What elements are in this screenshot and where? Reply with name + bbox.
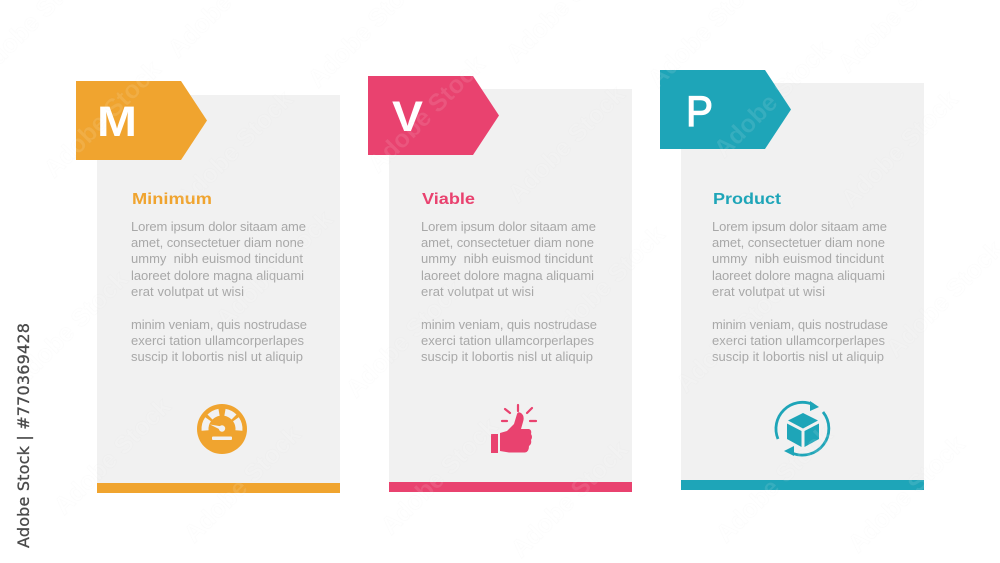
watermark pattern: Adobe Stock (48, 392, 176, 520)
watermark pattern: Adobe Stock (842, 430, 970, 558)
text block: minimum: amet, consectetuer diam none (131, 235, 304, 250)
panel: viable (368, 76, 632, 492)
stock id label: Adobe Stock | #770369428 (14, 323, 33, 548)
heading: Product: Product (713, 191, 782, 208)
panel: product (660, 70, 924, 490)
text block: viable: exerci tation ullamcorperlapes (421, 333, 594, 348)
watermark pattern: Adobe Stock (38, 55, 166, 183)
text block: minimum (131, 219, 307, 364)
text block: viable (421, 219, 597, 364)
text block: product: suscip it lobortis nisl ut aliquip (712, 349, 884, 364)
watermark pattern: Adobe Stock (542, 220, 670, 348)
card background: viable (389, 89, 632, 492)
watermark pattern: Adobe Stock (5, 265, 133, 393)
text block: product: ummy nibh euismod tincidunt (712, 251, 884, 266)
bottom bar: product (681, 480, 924, 490)
watermark pattern: Adobe Stock (835, 85, 963, 213)
icon: box with cycle arrows (776, 401, 829, 456)
watermark pattern: Adobe Stock (170, 85, 298, 213)
watermark pattern: Adobe Stock (710, 420, 838, 548)
watermark pattern: Adobe Stock (340, 275, 468, 403)
watermark pattern: Adobe Stock (210, 205, 338, 333)
watermark pattern: Adobe Stock (502, 80, 630, 208)
icon: thumbs up with rays (491, 405, 536, 453)
watermark pattern: Adobe Stock (375, 412, 503, 540)
text block: minimum: ummy nibh euismod tincidunt (131, 251, 303, 266)
bottom bar: viable (389, 482, 632, 492)
card background: product (681, 83, 924, 490)
text block: product: Lorem ipsum dolor sitaam ame (712, 219, 887, 234)
arrow tag: M: M (97, 98, 137, 146)
panel: minimum (76, 81, 340, 493)
text block: product: erat volutpat ut wisi (712, 284, 825, 299)
text block: minimum: minim veniam, quis nostrudase (131, 317, 307, 332)
text block: viable: Lorem ipsum dolor sitaam ame (421, 219, 596, 234)
watermark pattern: Adobe Stock (362, 50, 490, 178)
icon: speedometer (197, 404, 247, 454)
text block: viable: erat volutpat ut wisi (421, 284, 534, 299)
heading: Viable: Viable (422, 191, 475, 208)
text block: minimum: exerci tation ullamcorperlapes (131, 333, 304, 348)
card background: minimum (97, 95, 340, 493)
text block: minimum: erat volutpat ut wisi (131, 284, 244, 299)
arrow tag: M (76, 81, 207, 160)
watermark pattern: Adobe Stock (670, 270, 798, 398)
text block: viable: minim veniam, quis nostrudase (421, 317, 597, 332)
watermark pattern: Adobe Stock (505, 435, 633, 563)
heading: Minimum: Minimum (132, 191, 212, 208)
text block: product: laoreet dolore magna aliquami (712, 268, 885, 283)
text block: product: exerci tation ullamcorperlapes (712, 333, 886, 348)
bottom bar: minimum (97, 483, 340, 493)
text block: viable: amet, consectetuer diam none (421, 235, 594, 250)
watermark pattern: Adobe Stock (178, 420, 306, 548)
arrow tag: P (660, 70, 791, 149)
text block: minimum: Lorem ipsum dolor sitaam ame (131, 219, 306, 234)
arrow tag: P: P (686, 88, 713, 136)
watermark pattern: Adobe Stock (708, 35, 836, 163)
text block: product: amet, consectetuer diam none (712, 235, 885, 250)
arrow tag: V: V (392, 93, 423, 141)
text block: minimum: laoreet dolore magna aliquami (131, 268, 304, 283)
arrow tag: V (368, 76, 499, 155)
text block: viable: laoreet dolore magna aliquami (421, 268, 594, 283)
text block: minimum: suscip it lobortis nisl ut aliquip (131, 349, 303, 364)
text block: viable: suscip it lobortis nisl ut aliquip (421, 349, 593, 364)
text block: viable: ummy nibh euismod tincidunt (421, 251, 593, 266)
text block: product: minim veniam, quis nostrudase (712, 317, 888, 332)
text block: product (712, 219, 888, 364)
